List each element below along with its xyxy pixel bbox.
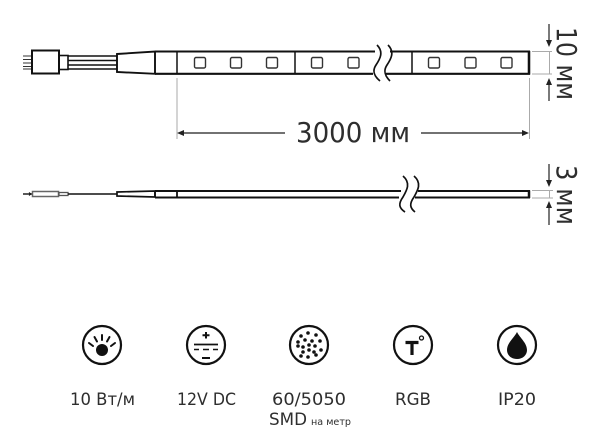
icon: water drop	[498, 326, 536, 364]
strip taper end	[117, 52, 155, 74]
side taper and body	[117, 190, 529, 198]
icon: LED density	[290, 326, 328, 364]
icon: voltage	[187, 326, 225, 364]
thickness label: 3 мм	[550, 165, 582, 225]
strip body	[155, 51, 529, 74]
label: IP rating: IP20	[498, 390, 536, 410]
label: SMD per metre	[269, 410, 351, 430]
label: SMD per metre: на метр	[311, 417, 351, 428]
connector wires	[68, 56, 117, 69]
side connector	[23, 192, 68, 196]
icon: power	[83, 326, 121, 364]
label: voltage: 12V DC	[177, 390, 236, 410]
top view strip drawing	[23, 45, 529, 81]
length label: 3000 мм	[296, 117, 410, 149]
label: RGB: RGB	[395, 390, 431, 410]
break mark	[374, 45, 392, 81]
LED chips	[194, 58, 512, 68]
dimension: 3000 mm length	[177, 78, 530, 149]
label: power: 10 Вт/м	[70, 390, 135, 410]
label: LED type: 60/5050	[272, 390, 346, 410]
dimension: 10 mm width	[532, 24, 582, 101]
label: SMD per metre: SMD	[269, 410, 307, 430]
side view strip drawing	[23, 176, 529, 212]
dimension: 3 mm thickness	[532, 164, 582, 225]
connector plug	[23, 50, 68, 74]
width label: 10 мм	[550, 27, 582, 100]
side wire	[68, 193, 117, 195]
side break mark	[400, 176, 419, 212]
icon: colour temperature T	[394, 326, 432, 364]
